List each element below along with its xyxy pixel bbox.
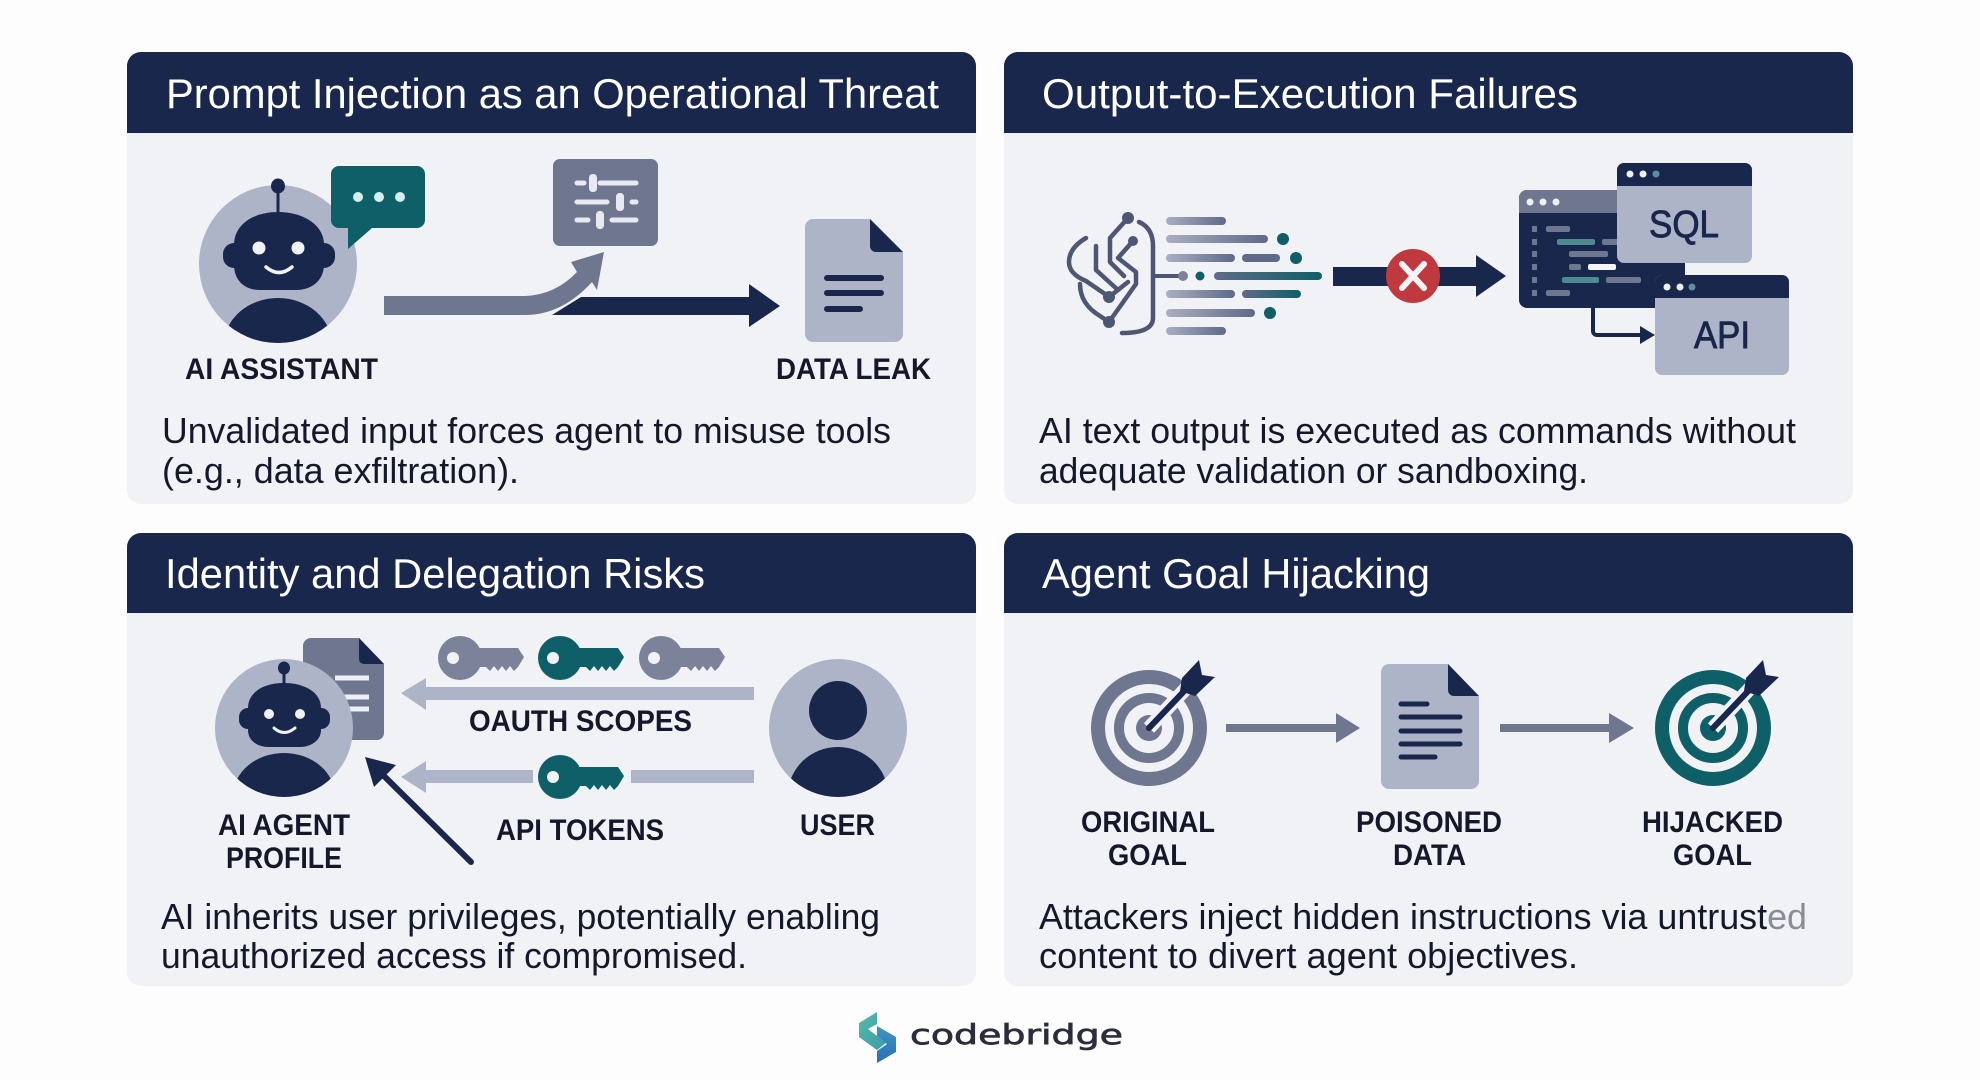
icon: SQL window: [1617, 163, 1752, 263]
arrow: goal to data: [1226, 713, 1360, 743]
label: hijacked goal: GOAL: [1673, 839, 1752, 872]
icon: logo mark: [859, 1012, 896, 1063]
label: AI assistant: AI ASSISTANT: [185, 353, 378, 386]
label: user: USER: [800, 809, 875, 842]
label: AI agent profile: [218, 809, 350, 875]
icon: scope key 1: [438, 636, 524, 680]
icon: token key: [538, 755, 624, 799]
icon: user: [769, 659, 907, 797]
arrow: API tokens: [401, 761, 754, 793]
icon: original goal target: [1098, 660, 1215, 779]
description: AI text output is executed as commands without: [1039, 410, 1796, 451]
icon: AI agent robot: [215, 659, 353, 797]
icon: API window: API: [1694, 315, 1750, 357]
arrow: to data leak: [552, 284, 780, 327]
panel body: [1004, 52, 1853, 504]
label: original goal: GOAL: [1108, 839, 1187, 872]
description: Attackers inject hidden instructions via untrusted: [1039, 896, 1807, 937]
arrow: input diverted to tool: [384, 252, 604, 315]
icon: scope key 2: [538, 636, 624, 680]
arrow: privilege escalation: [365, 757, 471, 862]
icon: tool sliders: [553, 159, 658, 246]
arrow: data to hijacked goal: [1500, 713, 1634, 743]
label: AI agent profile: PROFILE: [226, 842, 342, 875]
wordmark: codebridge: [910, 1018, 1123, 1051]
description: Unvalidated input forces agent to misuse tools: [162, 410, 891, 451]
description: [161, 896, 880, 976]
label: API tokens: API TOKENS: [496, 814, 664, 847]
icon: code window: [1519, 190, 1685, 308]
header bar: [127, 533, 976, 613]
panel: identity and delegation: [127, 533, 976, 986]
description: [162, 410, 891, 491]
description: adequate validation or sandboxing.: [1039, 450, 1588, 491]
heading: Output-to-Execution Failures: [1042, 70, 1578, 117]
label: hijacked goal: [1642, 806, 1783, 872]
panel body: [127, 52, 976, 504]
heading: Agent Goal Hijacking: [1042, 550, 1430, 597]
header bar: [1004, 533, 1853, 613]
arrow: output to execution: [1333, 255, 1506, 297]
description: [1039, 410, 1796, 491]
description: (e.g., data exfiltration).: [162, 450, 519, 491]
panel: output to execution: [1004, 52, 1853, 504]
icon: speech bubble: [331, 166, 425, 249]
label: original goal: [1081, 806, 1215, 872]
icon: poisoned document: [1381, 664, 1479, 789]
panel: agent goal hijacking: [1004, 533, 1853, 986]
label: poisoned data: [1356, 806, 1502, 872]
icon: leaked document: [805, 219, 903, 342]
label: OAuth scopes: OAUTH SCOPES: [469, 705, 692, 738]
icon: text output lines: [1166, 217, 1322, 335]
icon: neural knot: [1069, 212, 1188, 333]
description: [1039, 896, 1807, 976]
label: data leak: DATA LEAK: [776, 353, 931, 386]
icon: scope key 3: [639, 636, 725, 680]
icon: connector to API: [1593, 308, 1655, 344]
heading: Identity and Delegation Risks: [165, 550, 705, 597]
label: poisoned data: POISONED: [1356, 806, 1502, 839]
header bar: [127, 52, 976, 133]
label: poisoned data: DATA: [1393, 839, 1466, 872]
icon: API window: [1655, 275, 1789, 375]
label: original goal: ORIGINAL: [1081, 806, 1215, 839]
heading: Prompt Injection as an Operational Threat: [166, 70, 939, 117]
description: content to divert agent objectives.: [1039, 935, 1578, 976]
label: AI agent profile: AI AGENT: [218, 809, 350, 842]
icon: AI assistant robot: [199, 178, 357, 343]
icon: hijacked goal target: [1662, 660, 1779, 779]
header bar: [1004, 52, 1853, 133]
panel body: [1004, 533, 1853, 986]
arrow: OAuth scopes: [401, 678, 754, 710]
panel: prompt injection: [127, 52, 976, 504]
icon: profile document: [303, 638, 384, 740]
description: unauthorized access if compromised.: [161, 935, 747, 976]
panel body: [127, 533, 976, 986]
icon: SQL window: SQL: [1649, 204, 1719, 246]
description: AI inherits user privileges, potentially enabling: [161, 896, 880, 937]
label: hijacked goal: HIJACKED: [1642, 806, 1783, 839]
icon: blocked cross: [1386, 249, 1440, 303]
logo: codebridge: [859, 1012, 1123, 1063]
